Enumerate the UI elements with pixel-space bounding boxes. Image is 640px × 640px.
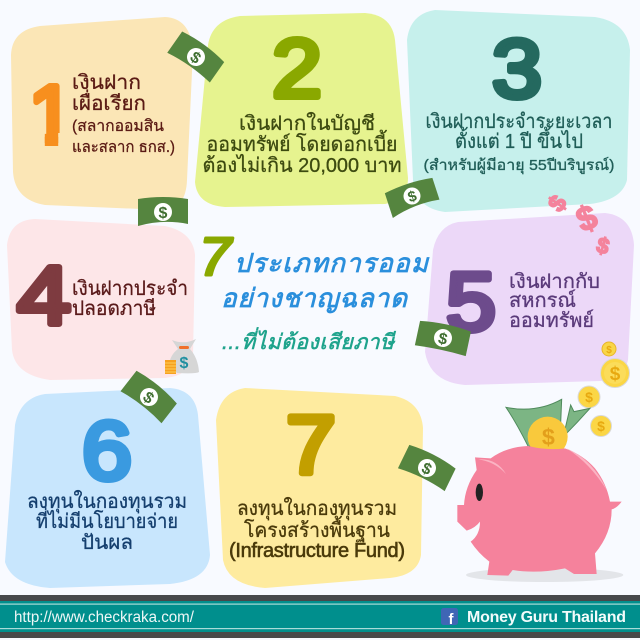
panel 3 text [424, 111, 614, 175]
panel 7 text: โครงสร้างพื้นฐาน [244, 516, 390, 542]
panel 4 text: ปลอดภาษี [72, 298, 156, 320]
panel 6: non-dividend mutual fund [5, 388, 210, 588]
footer bar [0, 595, 640, 638]
panel 2: savings account [195, 13, 408, 207]
panel 2 text: ต้องไม่เกิน 20,000 บาท [202, 154, 402, 177]
banknotes in slot [506, 399, 562, 447]
bill: panel 7 [398, 443, 457, 491]
panel 6 text: ลงทุนในกองทุนรวม [27, 490, 187, 514]
bill: panel 6 [121, 369, 179, 423]
panel 7 text: (Infrastructure Fund) [229, 540, 405, 562]
title numeral 7: 7 [199, 227, 233, 287]
icon: pink dollar signs: $ [571, 198, 603, 240]
bill: panel 2-3 [384, 176, 440, 218]
panel 3 background [407, 10, 630, 212]
coin in slot [528, 417, 568, 457]
panel 7 background [216, 388, 423, 588]
bill: panel 1-2 [167, 30, 226, 83]
bill: panel 5 [415, 319, 471, 356]
footer teal band [0, 601, 640, 632]
panel 1 background [11, 17, 193, 210]
bill: panel 5: $ [437, 330, 449, 349]
icon: facebook [441, 608, 458, 628]
website url: http://www.checkraka.com/ [14, 609, 195, 626]
icon: money bag and coins [165, 339, 199, 374]
bill: panel 1-4: $ [159, 205, 168, 222]
number 2: 2 [272, 22, 322, 115]
title [199, 227, 430, 354]
bill: panel 1-4 [138, 197, 188, 226]
coin in slot: $ [542, 424, 555, 450]
panel 4 background [7, 219, 195, 380]
panel 3 text: (สำหรับผู้มีอายุ 55ปีบริบูรณ์) [424, 157, 614, 175]
number 3: 3 [492, 22, 542, 115]
panel 5 text: เงินฝากกับ [509, 271, 600, 293]
icon: facebook: f [448, 611, 454, 628]
pig back highlight [567, 448, 607, 490]
bill: panel 6: $ [139, 389, 157, 408]
panel 5 text: สหกรณ์ [509, 289, 576, 312]
title line 2: อย่างชาญฉลาด [221, 283, 408, 313]
panel 5: cooperative deposit [425, 213, 634, 385]
pig ear highlight [478, 459, 506, 474]
panel 4 text [72, 278, 188, 320]
panel 7 text: ลงทุนในกองทุนรวม [237, 497, 397, 521]
panel 1 text [72, 72, 175, 156]
pig eye [476, 484, 483, 501]
number 7: 7 [286, 398, 336, 491]
panel 4 text: เงินฝากประจำ [72, 278, 188, 300]
footer dark bands [0, 595, 640, 638]
panel 1 text: และสลาก ธกส.) [72, 139, 175, 156]
icon: gold coins: $ [597, 418, 605, 434]
panel 1 text: เผื่อเรียก [72, 89, 146, 115]
panel 6 background [5, 388, 210, 588]
panel 3 text: เงินฝากประจำระยะเวลา [426, 111, 612, 133]
panel 5 background [425, 213, 634, 385]
panel 2 text: ออมทรัพย์ โดยดอกเบี้ย [206, 130, 398, 156]
panel 1 text: เงินฝาก [72, 72, 141, 94]
icon: money bag and coins: $ [180, 355, 189, 372]
bill: panel 7: $ [419, 460, 434, 479]
icon: gold coins: $ [585, 389, 593, 405]
number 5: 5 [446, 255, 496, 348]
panel 1: savings deposit [11, 17, 193, 210]
icon: pink dollar signs: $ [594, 232, 612, 259]
panel 5 text [509, 271, 600, 332]
number 4: 4 [17, 249, 71, 342]
page name: Money Guru Thailand [467, 609, 626, 626]
panel 2 text: เงินฝากในบัญชี [239, 112, 375, 135]
panel 3: fixed deposit [407, 10, 630, 212]
number 6: 6 [82, 404, 132, 497]
panel 2 background [195, 13, 408, 207]
number 1: 1 [28, 68, 75, 161]
pig body [457, 446, 622, 576]
title line 1: ประเภทการออม [234, 248, 430, 278]
panel 3 text: ตั้งแต่ 1 ปี ขึ้นไป [455, 127, 583, 153]
panel 1 text: (สลากออมสิน [72, 118, 164, 135]
subtitle: ...ที่ไม่ต้องเสียภาษี [222, 327, 396, 354]
bill: panel 2-3: $ [406, 187, 420, 206]
bill: panel 1-2: $ [187, 49, 204, 68]
panel 4: tax-free fixed deposit [7, 219, 199, 380]
panel 6 text: ปันผล [81, 532, 133, 554]
icon: pink dollar signs [543, 190, 612, 259]
panel 5 text: ออมทรัพย์ [509, 309, 594, 332]
panel 7: infrastructure fund [216, 388, 423, 588]
icon: gold coins: $ [606, 345, 612, 356]
panel 2 text [202, 112, 402, 177]
panel 6 text: ที่ไม่มีนโยบายจ่าย [36, 507, 178, 533]
piggy bank [457, 399, 623, 582]
icon: gold coins: $ [610, 364, 621, 385]
icon: gold coins [578, 342, 630, 436]
panel 7 text [229, 497, 405, 562]
icon: pink dollar signs: $ [543, 190, 573, 217]
panel 6 text [27, 490, 187, 554]
pig shadow [466, 568, 623, 582]
